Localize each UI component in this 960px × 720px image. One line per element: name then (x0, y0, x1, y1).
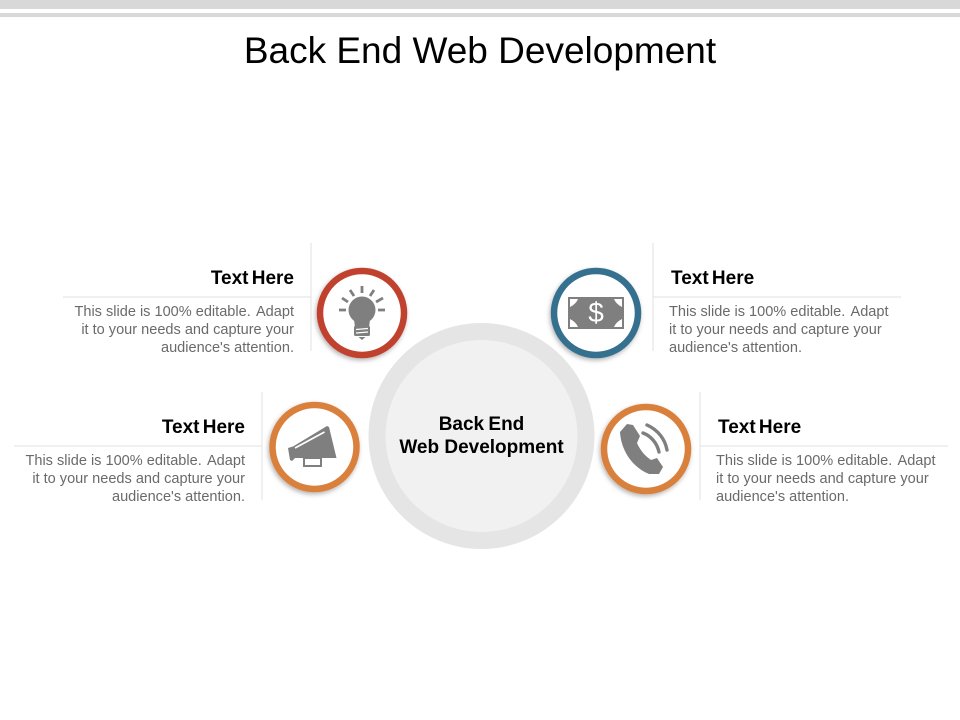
central circle (368, 323, 594, 549)
body text: it to your needs and capture your (32, 471, 245, 487)
body text: This slide is 100% editable. Adapt (669, 304, 889, 320)
icon: dollar bill ring (554, 271, 638, 355)
body text: audience's attention. (161, 340, 294, 356)
body text: This slide is 100% editable. Adapt (716, 453, 936, 469)
body text: audience's attention. (716, 489, 849, 505)
heading: Text Here (211, 268, 294, 289)
body text: audience's attention. (112, 489, 245, 505)
top header bars (0, 0, 960, 17)
title: Back End Web Development (244, 30, 717, 71)
icon: megaphone ring (272, 405, 356, 489)
icon: light bulb ring (320, 271, 404, 355)
panel: top left text (63, 243, 311, 356)
central label: Web Development (399, 437, 564, 458)
heading: Text Here (162, 417, 245, 438)
central label: Back End (439, 414, 524, 435)
body text: it to your needs and capture your (716, 471, 929, 487)
panel: bottom left text (14, 392, 262, 505)
panel: top right text (653, 243, 901, 356)
icon: telephone ring (604, 407, 688, 491)
icon: dollar bill ring: $ (588, 297, 604, 328)
body text: This slide is 100% editable. Adapt (74, 304, 294, 320)
body text: it to your needs and capture your (669, 322, 882, 338)
body text: This slide is 100% editable. Adapt (25, 453, 245, 469)
body text: audience's attention. (669, 340, 802, 356)
heading: Text Here (671, 268, 754, 289)
panel: bottom right text (700, 392, 948, 505)
body text: it to your needs and capture your (81, 322, 294, 338)
heading: Text Here (718, 417, 801, 438)
